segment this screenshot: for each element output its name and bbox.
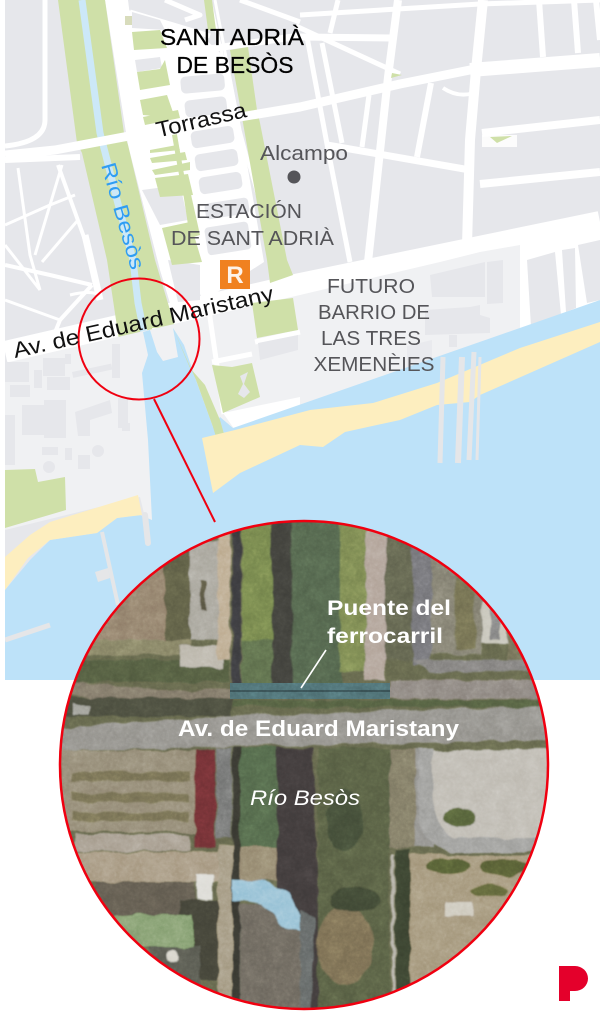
central green plots xyxy=(132,30,202,265)
river park green xyxy=(58,0,174,337)
label: Río Besòs on map: Río Besòs xyxy=(96,160,149,272)
label: Alcampo: Alcampo xyxy=(260,143,348,165)
label: de Sant Adrià: DE SANT ADRIÀ xyxy=(171,227,335,250)
road network xyxy=(5,0,600,352)
label: Sant Adrià de Besòs: SANT ADRIÀ xyxy=(160,24,305,50)
central white corridor xyxy=(105,0,178,302)
label: Av. de Eduard Maristany on map: Av. de Eduard Maristany xyxy=(11,281,276,363)
land south of the avenue xyxy=(5,245,520,530)
east rambla green xyxy=(204,0,293,283)
callout: Puente del ferrocarril: Puente del xyxy=(327,597,451,620)
callout: Puente del ferrocarril: ferrocarril xyxy=(327,625,443,648)
icon: Alcampo point xyxy=(288,170,300,184)
label: Estación: ESTACIÓN xyxy=(196,200,302,223)
callout: Puente del ferrocarril xyxy=(301,597,451,688)
central rounded blocks xyxy=(132,12,252,302)
logo xyxy=(559,966,588,1001)
label: Av. de Eduard Maristany on aerial: Av. de Eduard Maristany xyxy=(178,716,460,741)
label: Futuro barrio de las Tres Xemeneies: XEMENÈIES xyxy=(314,353,434,376)
base map xyxy=(5,0,600,680)
label: Futuro barrio de las Tres Xemeneies: FUTURO xyxy=(327,276,415,298)
icon: Rodalies station: R xyxy=(226,262,244,289)
label: Futuro barrio de las Tres Xemeneies xyxy=(314,276,434,376)
small parks xyxy=(252,298,298,338)
label: Futuro barrio de las Tres Xemeneies: BARRIO DE xyxy=(318,302,430,324)
Torrassa road xyxy=(5,66,470,157)
sea and river mouth xyxy=(5,300,600,680)
label: Río Besòs on aerial: Río Besòs xyxy=(250,787,361,810)
west industrial blocks xyxy=(5,344,130,473)
label: Futuro barrio de las Tres Xemeneies: LAS TRES xyxy=(321,328,421,350)
central white area xyxy=(128,10,264,300)
connector line xyxy=(154,399,215,522)
east beach xyxy=(202,322,600,493)
label: De Besòs: DE BESÒS xyxy=(176,52,294,78)
west beach xyxy=(5,495,142,590)
label: Torrassa: Torrassa xyxy=(154,97,250,142)
river channel xyxy=(82,0,148,352)
white streets around the parks xyxy=(208,316,300,414)
railway bridge xyxy=(230,683,390,699)
east land buildings xyxy=(258,240,600,360)
right bank strip xyxy=(174,331,224,435)
locator circle xyxy=(78,278,200,400)
aerial detail circle xyxy=(50,510,560,1016)
icon: Rodalies station xyxy=(220,260,250,289)
piers xyxy=(5,352,480,640)
